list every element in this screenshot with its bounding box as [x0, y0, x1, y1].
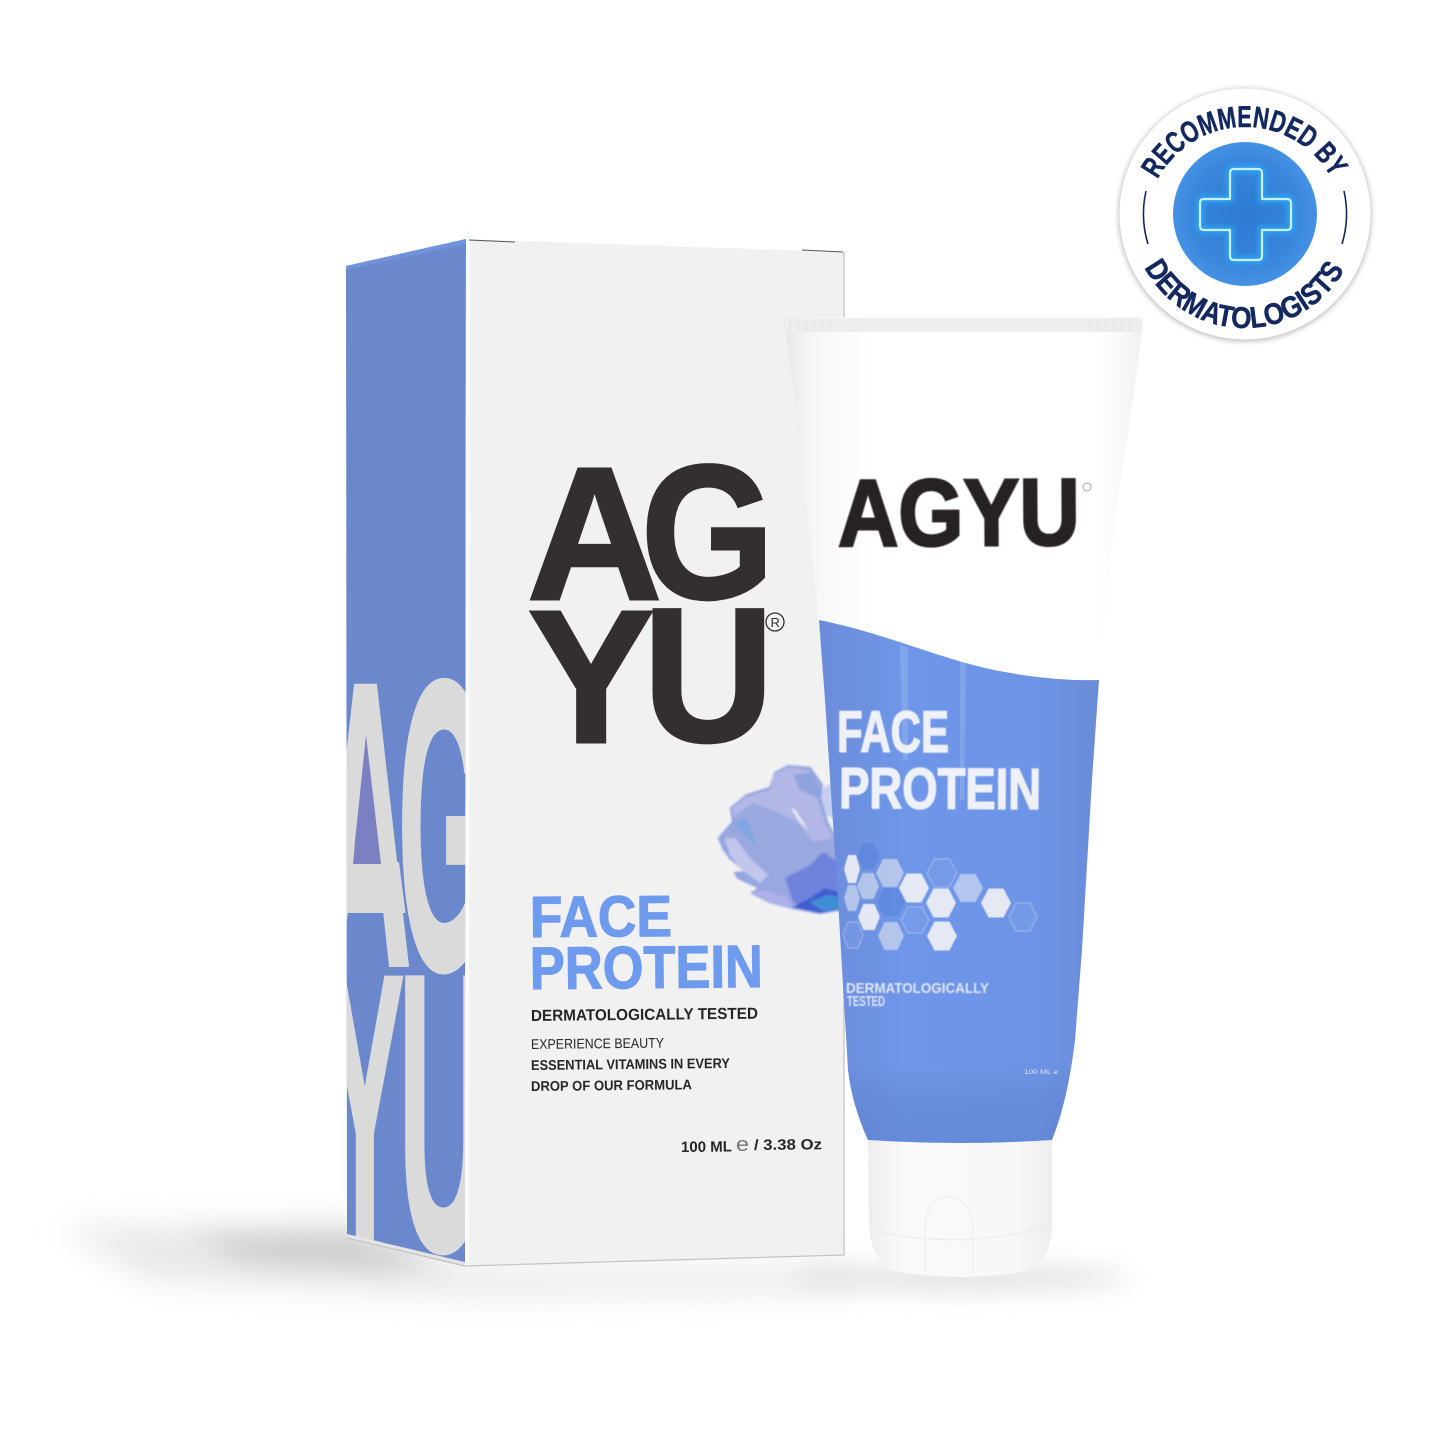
side lettering: A — [320, 601, 411, 1050]
logo AG YU: A — [527, 428, 662, 639]
tube claim: DERMATOLOGICALLY — [846, 980, 989, 997]
side lettering: Y — [325, 895, 405, 1324]
box volume: e — [736, 1134, 749, 1156]
tube highlights — [900, 645, 966, 800]
purple window inside side A — [353, 735, 381, 864]
box top flap marks — [469, 240, 843, 252]
registered mark — [766, 613, 784, 631]
flower — [719, 766, 848, 913]
box description: DROP OF OUR FORMULA — [531, 1076, 692, 1094]
badge blue circle — [1173, 142, 1317, 286]
box product name — [530, 884, 763, 1002]
tube claim — [846, 980, 989, 1010]
badge bottom text: DERMATOLOGISTS — [1144, 258, 1342, 328]
box front panel — [465, 239, 844, 1266]
tube cap — [868, 1135, 1052, 1277]
tube body white — [784, 317, 1143, 690]
flower base — [719, 766, 848, 913]
floor shadow — [60, 1222, 1130, 1296]
back petal — [820, 783, 832, 818]
box — [346, 239, 845, 1267]
logo AG YU — [527, 426, 774, 783]
tube claim: TESTED — [847, 993, 885, 1010]
badge disc — [1119, 89, 1371, 341]
box description: ESSENTIAL VITAMINS IN EVERY — [531, 1055, 731, 1073]
side lettering — [346, 678, 466, 1256]
box corner highlight — [465, 239, 470, 1266]
box side panel — [346, 239, 466, 1267]
box volume: / 3.38 Oz — [754, 1136, 822, 1154]
product scene — [85, 86, 1374, 1302]
box description — [531, 1035, 731, 1094]
logo AG YU: U — [643, 569, 774, 782]
tube product name: PROTEIN — [839, 756, 1041, 822]
side lettering: U — [398, 892, 490, 1335]
badge side arcs — [1143, 191, 1347, 244]
badge — [1116, 86, 1374, 344]
box product name: FACE — [530, 884, 672, 950]
side lettering: G — [398, 597, 489, 1056]
box edges — [347, 252, 844, 1266]
tube — [784, 317, 1143, 1277]
badge top text: RECOMMENDED BY — [1140, 106, 1349, 178]
box product name: PROTEIN — [530, 933, 763, 1002]
hexagon molecule graphic — [843, 843, 1037, 950]
tube product name: FACE — [837, 700, 949, 765]
tube body blue — [819, 620, 1099, 1143]
box volume — [681, 1134, 822, 1156]
logo AG YU: G — [641, 426, 774, 639]
box description: EXPERIENCE BEAUTY — [531, 1035, 665, 1052]
tube product name — [837, 700, 1041, 822]
box claim: DERMATOLOGICALLY TESTED — [531, 1006, 758, 1025]
tube ribbed crimp — [785, 318, 1142, 332]
registered mark: R — [770, 615, 780, 630]
neon cross — [1200, 169, 1291, 260]
tube blue bottom shade — [819, 620, 1099, 1143]
base strip of side — [347, 1234, 465, 1267]
box volume: 100 ML — [681, 1138, 732, 1156]
logo AG YU: Y — [528, 572, 654, 783]
tube logo: AGYU — [838, 460, 1080, 567]
tube registered mark — [1083, 483, 1091, 491]
tube volume: 100 ML e — [1024, 1070, 1059, 1076]
